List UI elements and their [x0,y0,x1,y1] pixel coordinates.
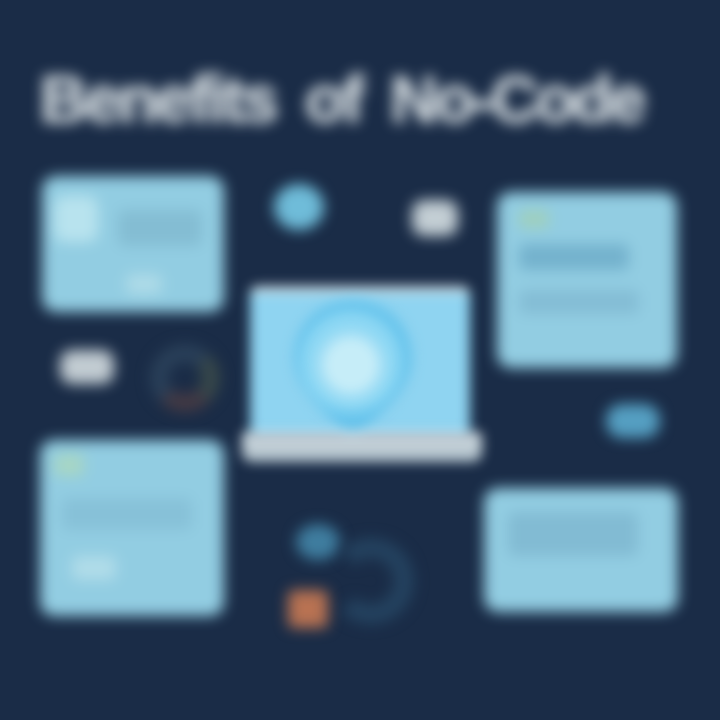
panel: bottom left card [40,440,224,616]
laptop base [242,432,482,462]
icon: top right card badge [519,210,549,228]
icon: pin center disc [316,330,386,400]
icon: bottom blue dot [296,524,340,560]
icon: bottom left card badge [54,454,84,476]
panel: bottom right card [484,488,678,612]
icon: top left card bottom mark [126,274,162,294]
icon: right blue pill [606,404,660,438]
panel: top left card [42,176,224,312]
text block: top right card lines [519,244,629,270]
text block: top right card lower lines [519,290,639,314]
text block: bottom left card lines [62,498,192,530]
icon: orange square [288,590,328,628]
laptop illustration [233,276,491,471]
icon: dark multicolor ring [150,344,220,412]
icon: top left card badge [54,196,98,242]
icon: top white badge [412,200,458,236]
icon: dark curved arrow [328,538,414,624]
icon: left white badge [60,350,114,384]
icon: bottom left card bottom mark [72,556,116,580]
icon: location pin [290,294,416,433]
title: Benefits of No-Code [40,62,643,136]
laptop screen [250,286,470,441]
text block: top left card lines [118,210,202,246]
icon: top blue dot [274,184,324,230]
text block: bottom right card lines [508,512,638,556]
panel: top right card [497,192,677,368]
